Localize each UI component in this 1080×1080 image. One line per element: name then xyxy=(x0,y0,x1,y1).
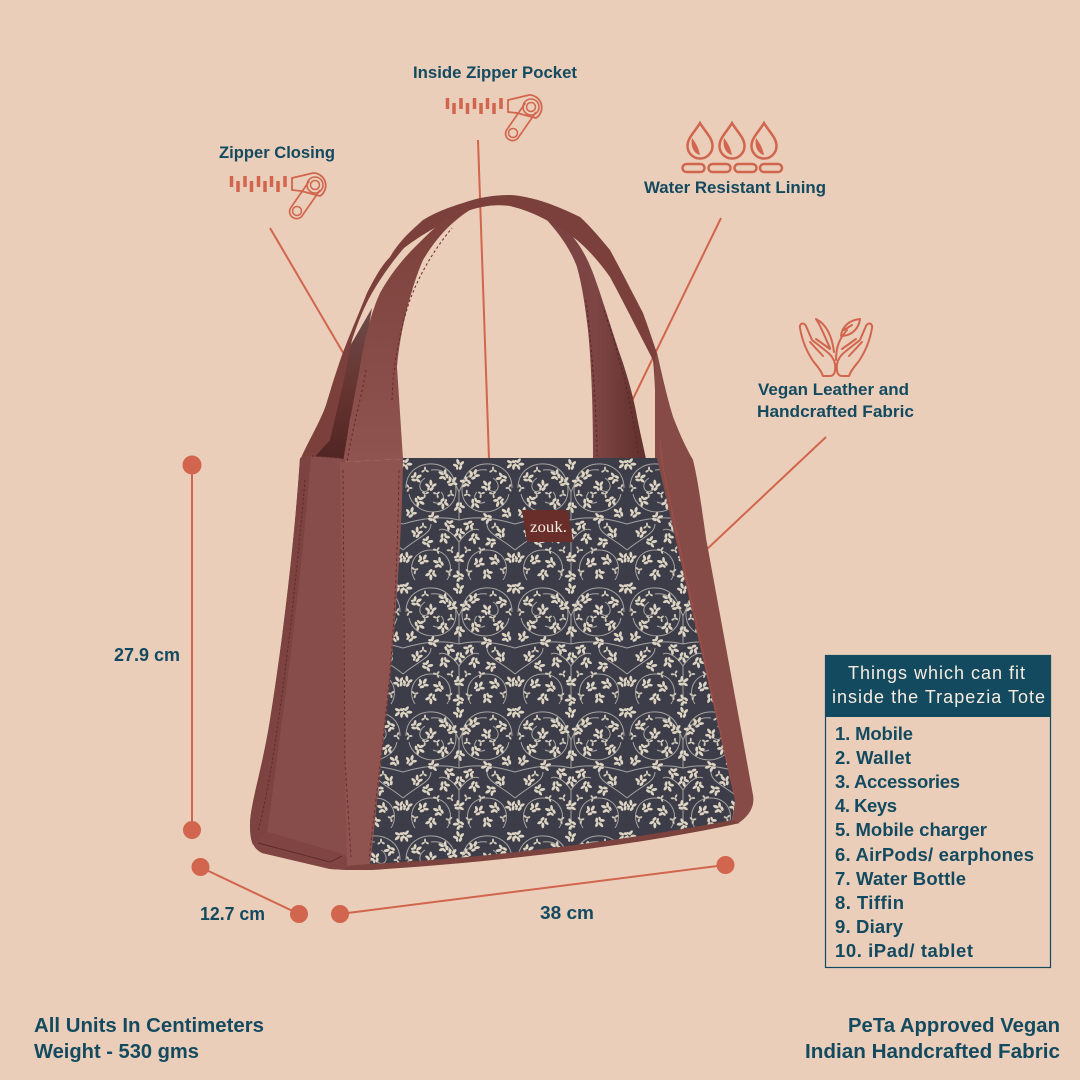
panel border xyxy=(826,656,1050,968)
panel header: inside the Trapezia Tote xyxy=(832,687,1045,707)
item list: 2. Wallet xyxy=(835,747,911,768)
panel header: Things which can fit xyxy=(848,663,1025,683)
footer: peta and fabric: PeTa Approved Vegan xyxy=(848,1015,1060,1037)
left panel stitching xyxy=(343,470,399,860)
label: inside zipper pocket: Inside Zipper Pocket xyxy=(413,64,578,82)
dimension: height xyxy=(114,456,202,839)
patterned fabric front xyxy=(370,458,735,865)
stitch: back right handle xyxy=(586,300,638,456)
footer: units and weight: Weight - 530 gms xyxy=(34,1041,199,1063)
stitch: front handle and panel xyxy=(347,228,452,462)
icon: zipper closing xyxy=(232,173,326,219)
dimension: width xyxy=(331,856,734,923)
panel: things which can fit xyxy=(825,655,1051,968)
bottom leather trim xyxy=(346,820,740,870)
item list: 6. AirPods/ earphones xyxy=(835,844,1034,865)
item list: 4. Keys xyxy=(835,795,897,816)
tote bag photo illustration xyxy=(250,195,753,870)
dimension: depth xyxy=(192,858,308,924)
footer: peta and fabric: Indian Handcrafted Fabric xyxy=(805,1041,1060,1063)
label: vegan leather and handcrafted fabric: Vegan Leather and xyxy=(758,381,909,399)
item list: 9. Diary xyxy=(835,916,904,937)
icon: water drops xyxy=(682,123,782,172)
right panel stitching xyxy=(660,440,735,800)
back right handle band xyxy=(545,218,646,459)
footer: units and weight: All Units In Centimeters xyxy=(34,1015,264,1037)
wide front handle xyxy=(343,200,515,462)
callout line: inside zipper pocket xyxy=(478,140,489,459)
zouk brand label xyxy=(522,510,573,542)
label: zipper closing: Zipper Closing xyxy=(219,144,335,162)
item list: 8. Tiffin xyxy=(835,892,904,913)
thin handle from left gusset over top to right panel xyxy=(300,195,693,460)
footer: units and weight xyxy=(34,1015,264,1063)
gusset inner panel stitch xyxy=(258,456,340,832)
icon: hands holding plant xyxy=(800,319,872,376)
gusset bottom lip xyxy=(253,832,348,870)
callout line: zipper closing xyxy=(270,228,345,356)
item list: 3. Accessories xyxy=(835,771,960,792)
item list: 5. Mobile charger xyxy=(835,819,987,840)
item list: 10. iPad/ tablet xyxy=(835,940,973,961)
footer: peta and fabric xyxy=(805,1015,1060,1063)
callout line: water resistant lining xyxy=(630,218,721,405)
item list: 7. Water Bottle xyxy=(835,868,966,889)
label: vegan leather and handcrafted fabric xyxy=(757,381,914,421)
left front panel xyxy=(340,459,403,870)
icon: inside zipper pocket xyxy=(448,95,542,141)
item list: 1. Mobile xyxy=(835,723,913,744)
left gusset xyxy=(250,456,348,870)
label: vegan leather and handcrafted fabric: Handcrafted Fabric xyxy=(757,403,914,421)
item list xyxy=(835,723,1034,961)
callout line: vegan leather xyxy=(705,437,826,551)
zouk brand label: zouk. xyxy=(530,519,567,536)
gusset shadow interior xyxy=(308,308,372,460)
label: water resistant lining: Water Resistant Lining xyxy=(644,179,826,197)
right side panel xyxy=(655,353,753,824)
panel header xyxy=(825,655,1051,717)
dimension: height: 27.9 cm xyxy=(114,645,180,665)
gusset outer fold xyxy=(250,457,311,845)
dimension: width: 38 cm xyxy=(540,903,594,923)
dimension: depth: 12.7 cm xyxy=(200,904,265,924)
